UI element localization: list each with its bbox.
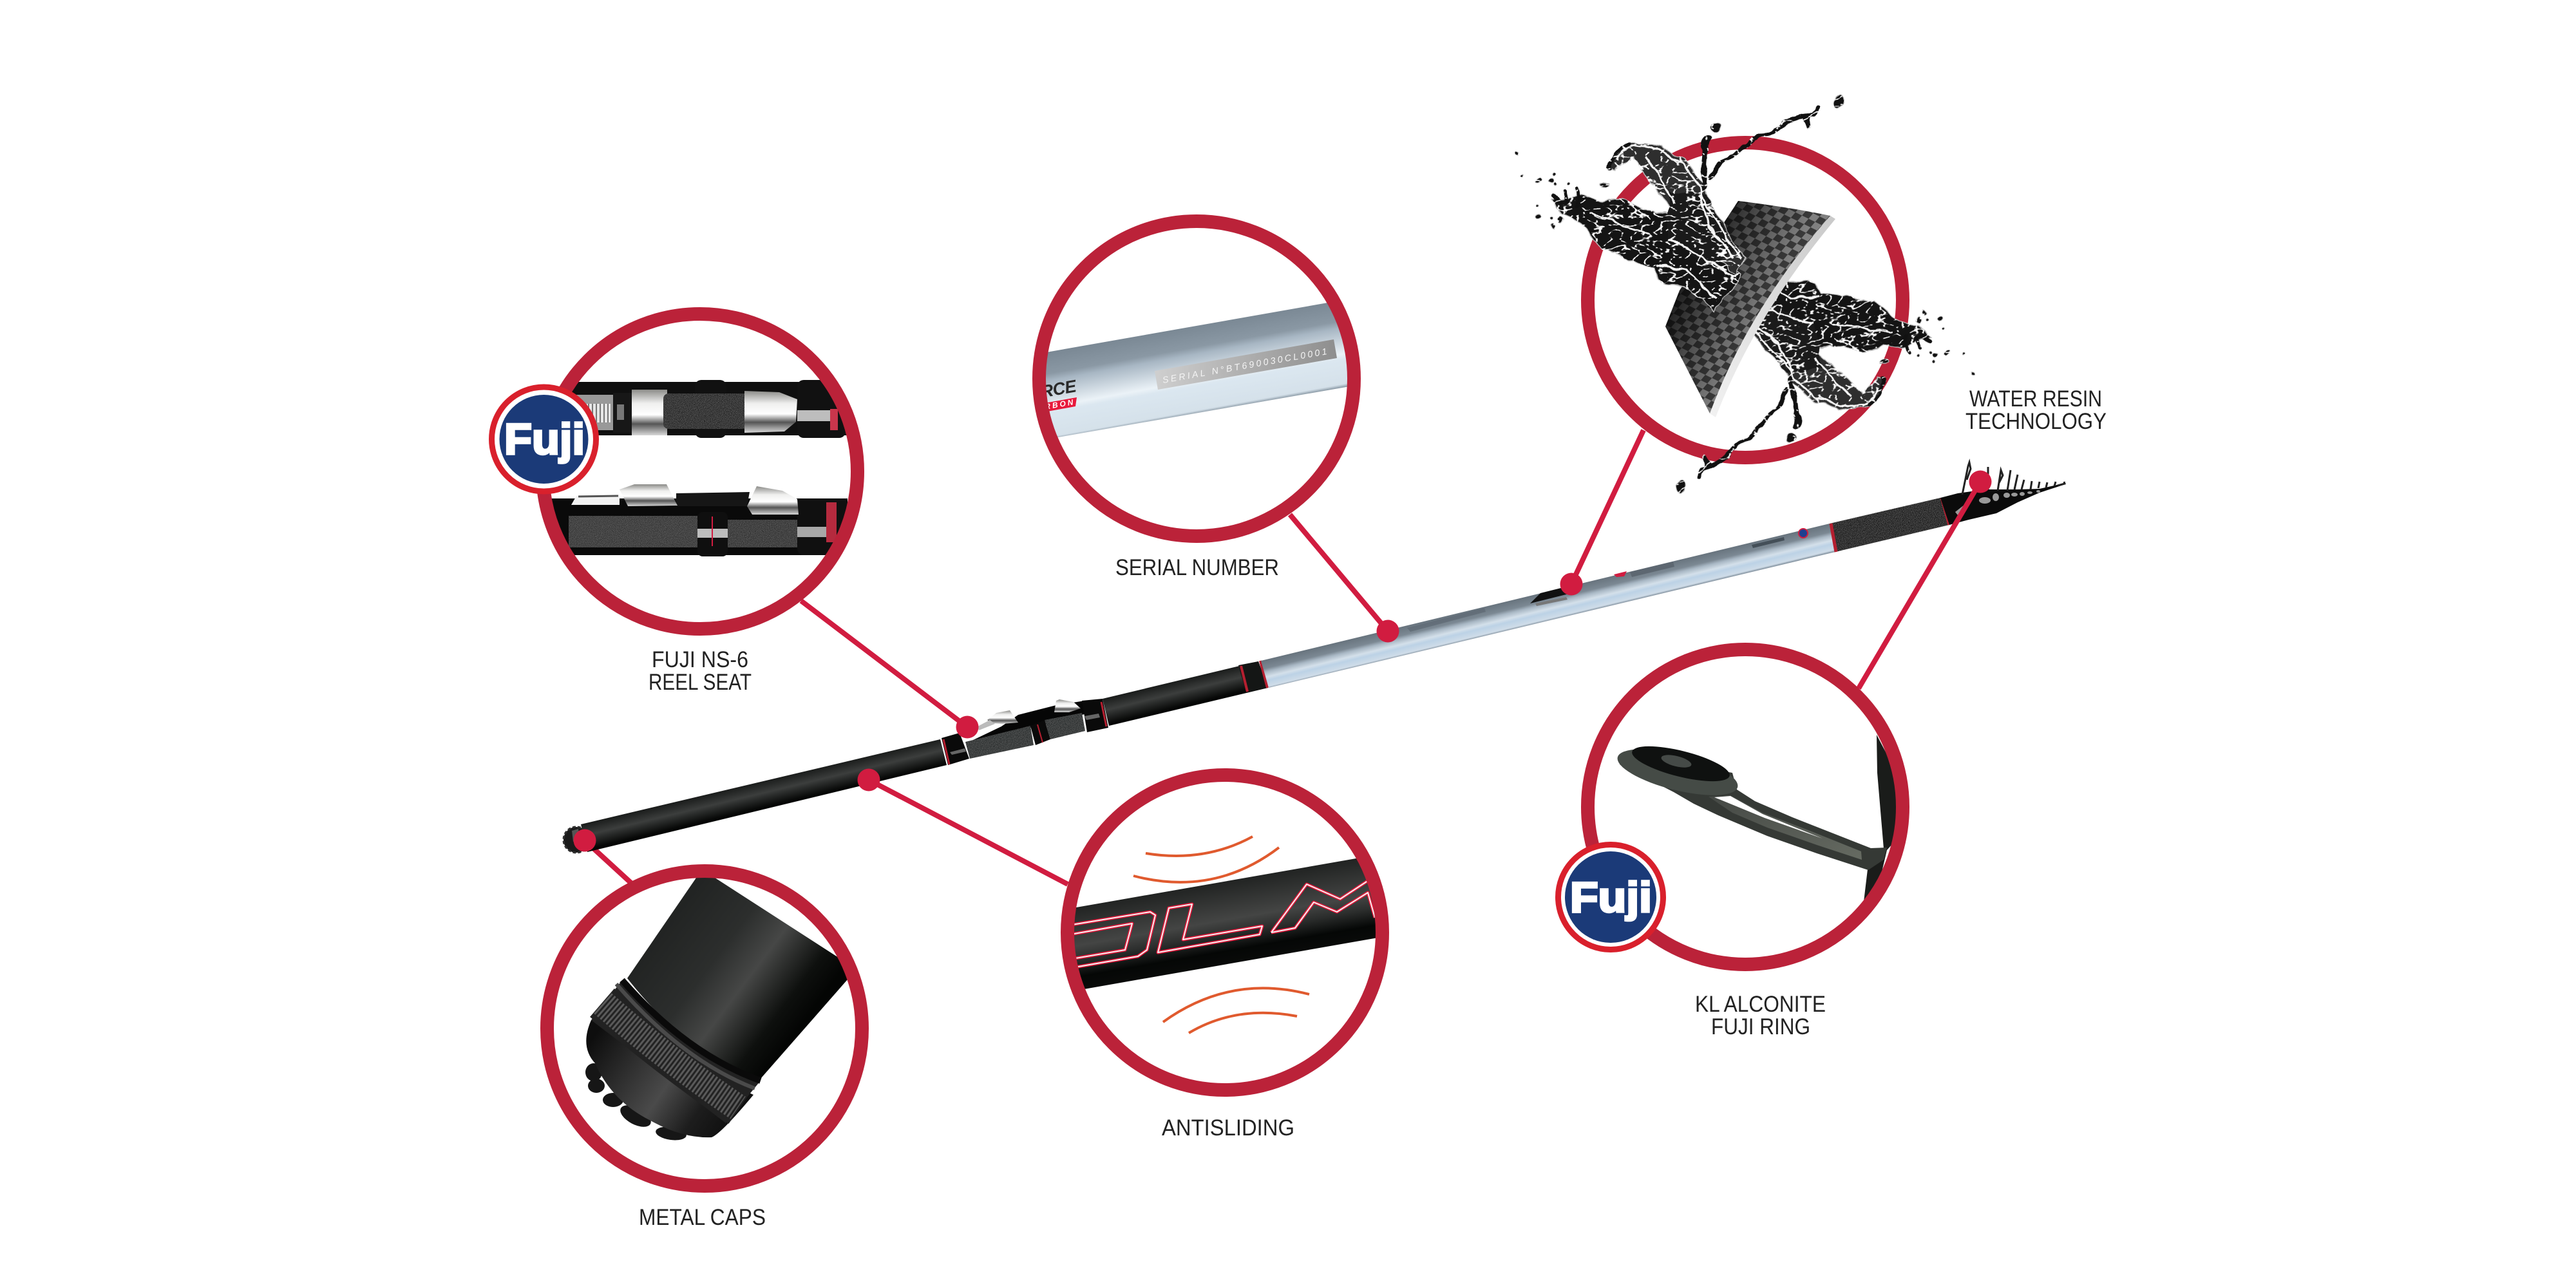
label: Fuji NS-6 reel seat: FUJI NS-6 <box>652 647 748 672</box>
panel: serial number detail <box>1032 214 1361 543</box>
icon: Fuji badge reel seat: Fuji <box>504 415 585 464</box>
panel: metal caps detail <box>547 869 862 1186</box>
rod blank <box>1864 735 1896 900</box>
knurl ridges <box>603 1003 738 1108</box>
friction arcs <box>1133 837 1309 1033</box>
mid black section <box>1103 661 1268 726</box>
butt cap of rod <box>564 827 589 853</box>
upper carbon section <box>1830 498 1949 552</box>
label: antisliding: ANTISLIDING <box>1162 1115 1294 1141</box>
label: Fuji NS-6 reel seat: REEL SEAT <box>649 670 752 695</box>
OLM lettering <box>1056 873 1381 971</box>
serial plate <box>1155 339 1337 390</box>
line guides <box>1962 462 2065 495</box>
splash droplets <box>1517 95 1842 229</box>
label: KL Alconite Fuji ring: FUJI RING <box>1711 1014 1810 1039</box>
guide ring photo <box>1613 735 1899 905</box>
ring <box>1068 775 1382 1090</box>
collar filler <box>591 980 761 1123</box>
mirrored water splash <box>1636 225 1985 493</box>
gap highlight <box>1714 796 1823 838</box>
rod close-up <box>1046 303 1347 438</box>
ring <box>547 871 862 1186</box>
label: KL Alconite Fuji ring: KL ALCONITE <box>1695 992 1826 1017</box>
cap dome <box>586 1020 753 1137</box>
ring <box>1588 649 1902 965</box>
splash highlights <box>1591 144 1742 298</box>
cap bumps <box>585 1063 687 1142</box>
leader line: antisliding <box>869 780 1068 884</box>
knurled ring base <box>602 1003 739 1108</box>
ring <box>1039 222 1354 536</box>
leader line: metal caps <box>585 840 632 884</box>
ring <box>1588 143 1902 457</box>
leader line: reel seat <box>801 601 967 727</box>
anchor dots <box>573 470 1991 851</box>
serial text: SERIAL N°BT690030CL0001 <box>1162 346 1328 385</box>
panel: water resin detail <box>1517 95 1985 493</box>
panel: reel seat detail <box>542 314 858 629</box>
tip section <box>1940 483 2065 525</box>
rod tube <box>627 869 857 1079</box>
tip highlights <box>1955 490 2040 515</box>
logo lettering: FORCE <box>1016 376 1079 406</box>
reel seat on rod <box>942 699 1108 765</box>
grey blank section <box>1261 524 1835 688</box>
carbon strip <box>1048 397 1077 411</box>
collar <box>616 984 755 1088</box>
icon: Fuji badge KL ring: Fuji <box>1570 873 1652 921</box>
label: serial number: SERIAL NUMBER <box>1115 555 1279 580</box>
label: water resin technology: TECHNOLOGY <box>1965 409 2107 434</box>
splash tendrils <box>1552 108 1817 207</box>
label: KL Alconite Fuji ring <box>1695 992 1826 1039</box>
leader line: serial number <box>1290 515 1388 631</box>
label: metal caps: METAL CAPS <box>639 1205 766 1230</box>
black ring <box>622 980 761 1081</box>
panel: antisliding detail <box>1043 775 1404 1090</box>
icon: Fuji badge reel seat <box>492 387 596 491</box>
label: water resin technology: WATER RESIN <box>1969 386 2102 412</box>
ring <box>542 314 858 629</box>
panel: KL ring detail <box>1588 649 1902 965</box>
rod decals <box>1407 529 1808 632</box>
leader line: KL ring <box>1859 482 1980 688</box>
fishing rod <box>564 462 2065 853</box>
rod close-up <box>1043 837 1404 1033</box>
guide frame <box>1620 753 1887 870</box>
reel seat photo <box>551 380 848 556</box>
water splash <box>1517 95 1842 312</box>
leader line: water resin <box>1571 430 1643 584</box>
red wraps <box>1831 498 1949 552</box>
label: water resin technology <box>1965 386 2107 434</box>
label: Fuji NS-6 reel seat <box>649 647 752 695</box>
bands with red stripes <box>1238 661 1268 692</box>
carbon sheet <box>1665 201 1835 417</box>
lower black section <box>581 739 947 852</box>
icon: Fuji badge KL ring <box>1558 845 1663 949</box>
guide web <box>1709 795 1862 860</box>
guide ring <box>1618 746 1738 795</box>
carbon strip: CARBON <box>1029 397 1074 414</box>
end cap photo <box>585 869 857 1142</box>
